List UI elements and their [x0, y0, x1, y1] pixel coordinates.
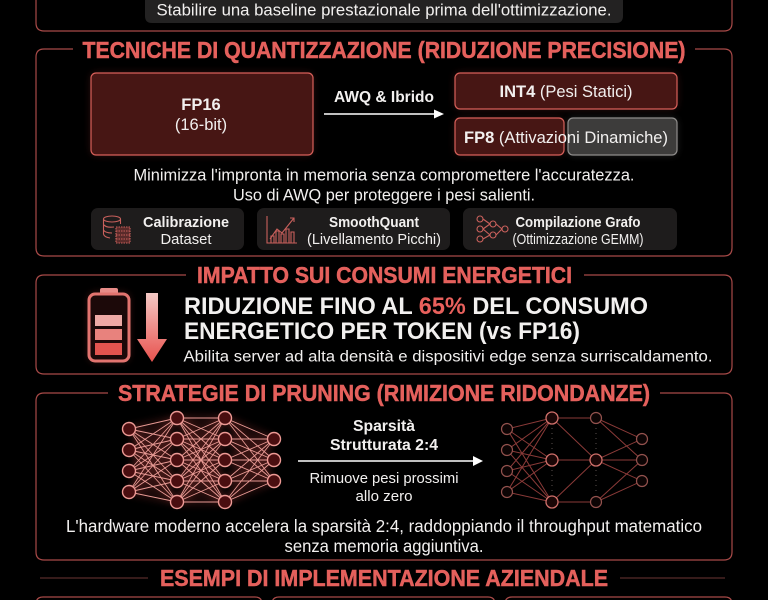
chip: compilazione grafo: Compilazione Grafo: [516, 214, 640, 231]
chip: smoothquant: SmoothQuant: [329, 214, 419, 231]
text: energy reduction headline: RIDUZIONE FINO AL 65% DEL CONSUMO: [184, 293, 648, 320]
chart: sparse neural network: [502, 412, 648, 508]
box: FP16: (16-bit): [175, 116, 227, 134]
text: quantizzazione description: Uso di AWQ per proteggere i pesi salienti.: [233, 186, 535, 204]
example cards (cropped): [36, 597, 732, 600]
icon: graph: [477, 216, 508, 242]
icon: database: [104, 216, 130, 243]
heading: quantizzazione: TECNICHE DI QUANTIZZAZIONE (RIDUZIONE PRECISIONE): [82, 37, 686, 63]
arrow: sparsita strutturata: Strutturata 2:4: [330, 437, 438, 454]
chip: compilazione grafo: [463, 208, 677, 250]
panel: baseline (top, cropped): [36, 0, 732, 31]
heading: pruning: STRATEGIE DI PRUNING (RIMIZIONE RIDONDANZE): [118, 380, 650, 406]
text: quantizzazione description: Minimizza l'impronta in memoria senza compromettere l'accuratezza.: [134, 166, 634, 184]
box: FP16: [91, 73, 313, 155]
box: FP8 and dynamic activations: [455, 118, 677, 155]
arrow: AWQ & Ibrido: [324, 89, 444, 118]
panel: esempi di implementazione aziendale: [36, 565, 732, 600]
baseline callout pill: Stabilire una baseline prestazionale prima dell'ottimizzazione.: [156, 0, 612, 20]
icon: bar chart: [267, 216, 297, 243]
chip: smoothquant: [257, 208, 450, 250]
text: pruning description: [66, 516, 702, 556]
chip: calibrazione dataset: [91, 208, 244, 250]
text: pruning description: senza memoria aggiuntiva.: [284, 536, 484, 556]
box: INT4: INT4 (Pesi Statici): [500, 83, 632, 101]
text: energy description: Abilita server ad alta densità e dispositivi edge senza surriscaldamento.: [184, 348, 712, 366]
chip: calibrazione dataset: Calibrazione: [143, 214, 229, 231]
panel: impatto sui consumi energetici: [36, 262, 732, 374]
text: energy reduction headline: [184, 293, 648, 345]
box: FP16: FP16: [181, 96, 221, 114]
panel: tecniche di quantizzazione: [36, 37, 732, 256]
panel: strategie di pruning: [36, 380, 732, 560]
arrow: sparsita strutturata: [298, 418, 483, 505]
heading: esempi: ESEMPI DI IMPLEMENTAZIONE AZIENDALE: [160, 565, 608, 591]
arrow: sparsita strutturata: Sparsità: [353, 418, 415, 435]
box: INT4: [455, 73, 677, 109]
chip: compilazione grafo: (Ottimizzazione GEMM): [512, 231, 644, 248]
heading: impatto: IMPATTO SUI CONSUMI ENERGETICI: [197, 262, 572, 288]
box: FP8 and dynamic activations: FP8 (Attivazioni Dinamiche): [464, 129, 668, 147]
text: quantizzazione description: [134, 166, 634, 204]
icon: down arrow: [137, 293, 167, 362]
chart: dense neural network: [122, 412, 280, 508]
arrow: sparsita strutturata: allo zero: [356, 488, 412, 505]
text: pruning description: L'hardware moderno accelera la sparsità 2:4, raddoppiando il throughput matematico: [66, 516, 702, 536]
arrow: AWQ & Ibrido: AWQ & Ibrido: [334, 89, 434, 106]
chip: calibrazione dataset: Dataset: [160, 231, 212, 248]
icon: battery: [89, 288, 129, 361]
text: energy reduction headline: ENERGETICO PER TOKEN (vs FP16): [184, 318, 580, 345]
arrow: sparsita strutturata: Rimuove pesi prossimi: [310, 470, 458, 487]
chip: smoothquant: (Livellamento Picchi): [307, 231, 441, 248]
